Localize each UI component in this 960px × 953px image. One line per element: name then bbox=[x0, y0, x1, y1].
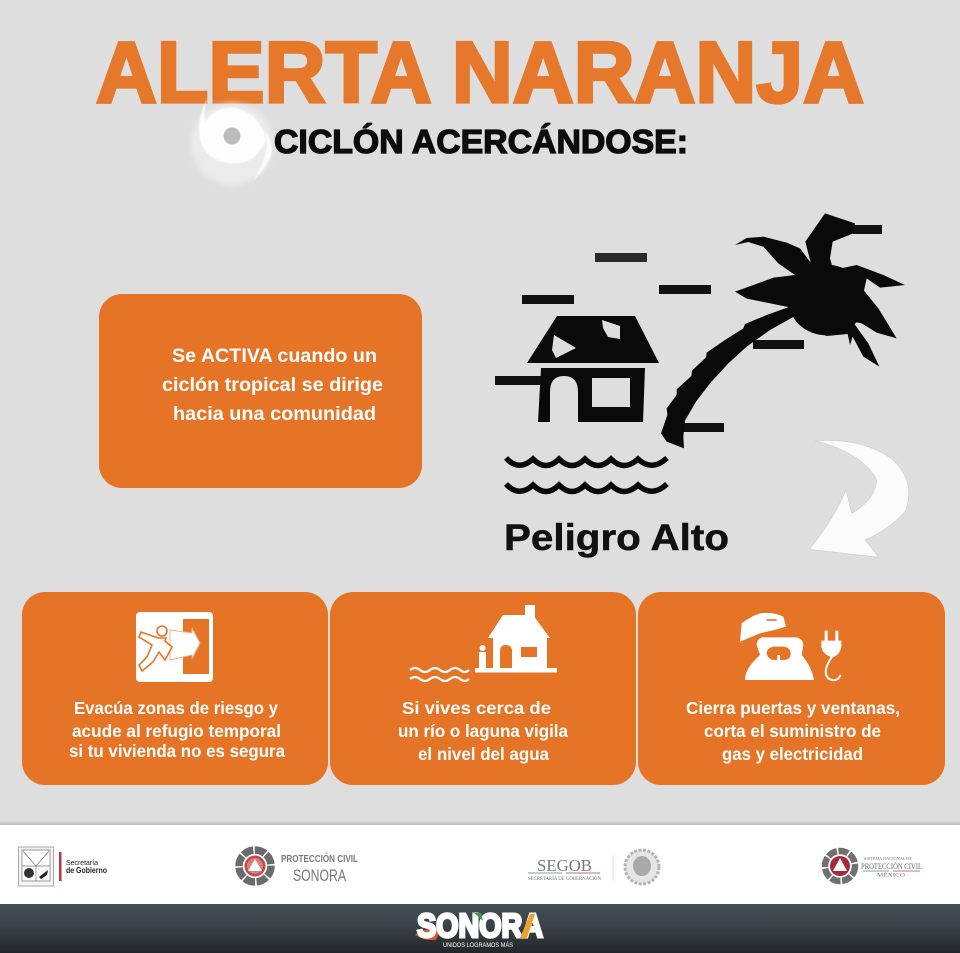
footer: dark band bbox=[0, 904, 960, 953]
activation text: hacia una comunidad bbox=[173, 404, 376, 425]
utilities text bbox=[686, 698, 900, 764]
icon: hand, iron and plug bbox=[740, 613, 841, 680]
logo: Sistema Nacional de Protección Civil: SISTEMA NACIONAL DE bbox=[864, 856, 912, 861]
icon: emergency exit bbox=[136, 612, 213, 682]
icon: storm scene bbox=[495, 213, 905, 492]
footer: logo band bbox=[0, 825, 960, 904]
activation text bbox=[162, 346, 383, 425]
logo: Secretaría de Gobierno: Secretaría bbox=[66, 858, 99, 867]
subtitle: CICLÓN ACERCÁNDOSE: bbox=[274, 123, 688, 160]
icon: house by river bbox=[410, 605, 557, 681]
logo: SEGOB: SEGOB bbox=[537, 856, 592, 875]
utilities text: Cierra puertas y ventanas, bbox=[686, 698, 900, 718]
heading: danger level: Peligro Alto bbox=[504, 517, 729, 558]
logo: Secretaría de Gobierno: de Gobierno bbox=[66, 866, 107, 875]
logo: SEGOB bbox=[528, 850, 659, 884]
logo: Secretaría de Gobierno bbox=[18, 847, 107, 886]
panel: evacuate bbox=[22, 592, 328, 785]
logo: Sistema Nacional de Protección Civil bbox=[825, 851, 922, 881]
panel: activation bbox=[99, 294, 422, 488]
evacuate text: Evacúa zonas de riesgo y bbox=[74, 698, 278, 718]
logo: Protección Civil Sonora bbox=[239, 850, 358, 885]
logo: Sonora: SONORA bbox=[417, 907, 543, 945]
logo: Sistema Nacional de Protección Civil: MÉXICO bbox=[877, 872, 906, 878]
icon: cyclone bbox=[191, 97, 273, 185]
arrow bbox=[809, 440, 909, 557]
panel: close utilities bbox=[638, 592, 945, 785]
activation text: Se ACTIVA cuando un bbox=[172, 346, 377, 367]
house bbox=[527, 316, 659, 422]
utilities text: gas y electricidad bbox=[722, 744, 863, 764]
logo: Sonora: UNIDOS LOGRAMOS MÁS bbox=[443, 942, 513, 949]
palm tree bbox=[661, 213, 905, 448]
water level text bbox=[398, 698, 568, 764]
wind bars bbox=[495, 225, 882, 432]
water waves bbox=[506, 458, 667, 492]
title: ALERTA NARANJA bbox=[96, 24, 864, 121]
logo: Protección Civil Sonora: SONORA bbox=[293, 866, 346, 885]
evacuate text: si tu vivienda no es segura bbox=[69, 741, 285, 761]
utilities text: corta el suministro de bbox=[704, 721, 881, 741]
water level text: un río o laguna vigila bbox=[398, 721, 568, 741]
logo: SEGOB: SECRETARÍA DE GOBERNACIÓN bbox=[528, 876, 601, 882]
activation text: ciclón tropical se dirige bbox=[162, 375, 383, 396]
water level text: el nivel del agua bbox=[418, 744, 549, 764]
evacuate text: acude al refugio temporal bbox=[72, 721, 281, 741]
water level text: Si vives cerca de bbox=[402, 698, 551, 718]
logo: Sistema Nacional de Protección Civil: PROTECCIÓN CIVIL bbox=[861, 861, 922, 871]
evacuate text bbox=[69, 698, 285, 761]
logo: Protección Civil Sonora: PROTECCIÓN CIVIL bbox=[281, 852, 358, 865]
panel: water level bbox=[330, 592, 636, 785]
